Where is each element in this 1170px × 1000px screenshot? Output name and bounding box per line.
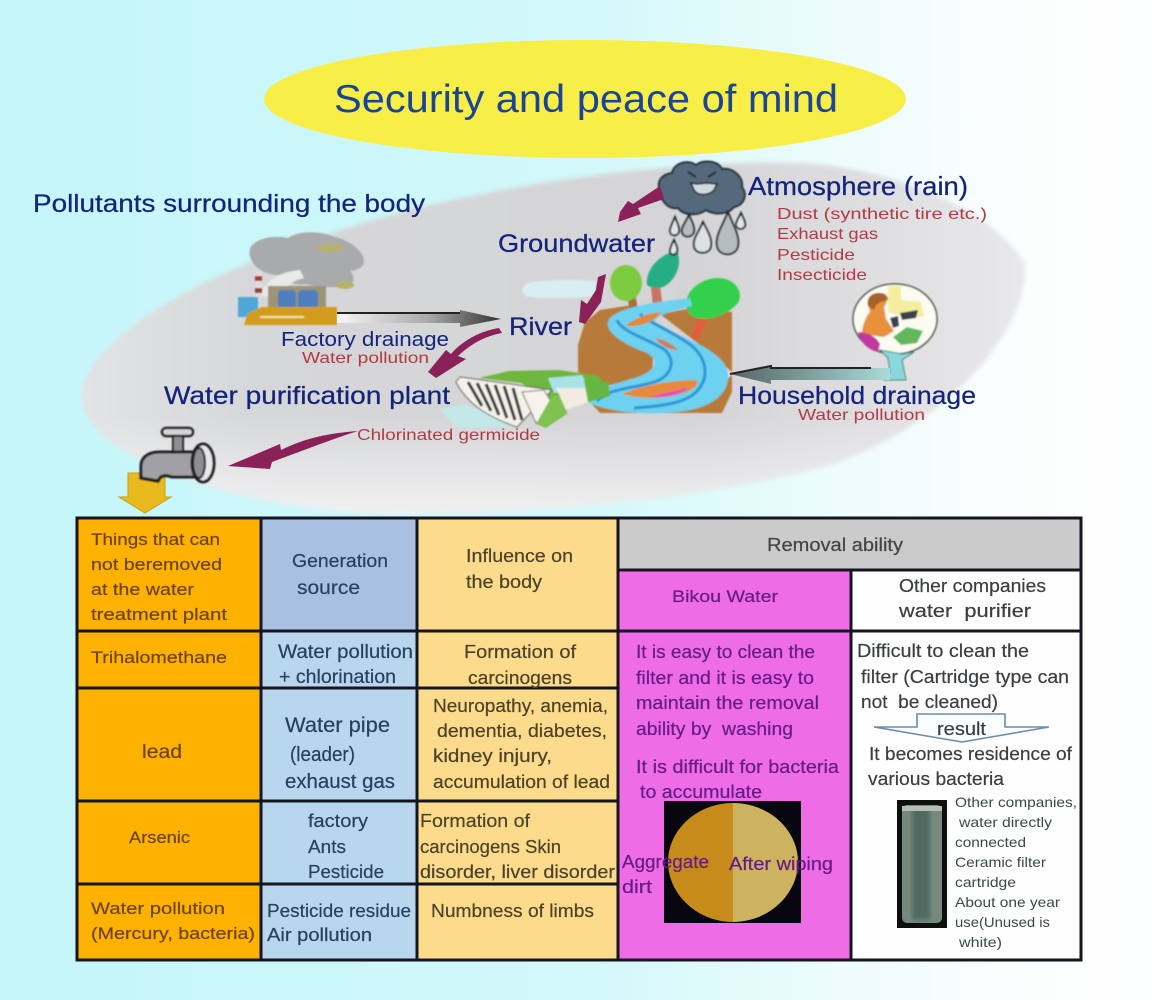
header: things that cannot be removed: treatment plant: [91, 605, 227, 624]
row: arsenic: factory: [308, 811, 368, 831]
panel: other companies removal: [857, 641, 1077, 950]
photo: filter disc: [664, 801, 801, 923]
icon: cloud with rain drops: [659, 162, 745, 255]
row: arsenic: disorder, liver disorder: [420, 862, 615, 882]
panel: other companies removal: various bacteria: [868, 769, 1005, 789]
label: atmosphere and pollutants: Atmosphere (rain): [748, 171, 968, 201]
icon: mist cloud: [523, 280, 596, 298]
gray backdrop oval: [82, 163, 1025, 514]
label: atmosphere and pollutants: Insecticide: [777, 267, 867, 284]
panel: bikou water removal: ability by washing: [636, 719, 793, 739]
arrow: factory to river: [337, 310, 501, 327]
icon: river landscape: [578, 251, 740, 413]
cartridge caption: use(Unused is: [955, 914, 1050, 930]
row: lead: exhaust gas: [285, 771, 395, 793]
arrow: result: [874, 714, 1049, 742]
panel: other companies removal: not be cleaned): [861, 692, 998, 712]
cartridge caption: [955, 794, 1077, 950]
header: generation source: [292, 551, 388, 599]
panel: other companies removal: result: [937, 719, 986, 739]
panel: bikou water removal: Aggregate: [622, 852, 709, 872]
label: chlorinated germicide: Chlorinated germicide: [357, 427, 540, 444]
label: atmosphere and pollutants: [748, 171, 987, 284]
cartridge caption: water directly: [958, 814, 1052, 830]
cartridge caption: Other companies,: [955, 794, 1077, 810]
panel: bikou water removal: After wiping: [729, 854, 833, 874]
arrow: cloud to groundwater: [618, 186, 664, 222]
row: lead: kidney injury,: [433, 746, 552, 766]
icon: household sink circle: [853, 284, 937, 380]
row: trihalomethane: Water pollution: [278, 642, 413, 663]
row: water pollution: Pesticide residue: [267, 901, 411, 921]
cartridge caption: cartridge: [955, 874, 1016, 890]
header: things that cannot be removed: not beremoved: [91, 555, 222, 574]
row: arsenic: Pesticide: [308, 862, 384, 882]
row: arsenic: Formation of: [420, 811, 531, 831]
row: lead: dementia, diabetes,: [437, 721, 607, 741]
panel: bikou water removal: filter and it is easy to: [636, 668, 814, 688]
label: household drainage: [738, 382, 976, 424]
panel: bikou water removal: maintain the removal: [636, 693, 819, 713]
row: trihalomethane: Formation of: [464, 642, 577, 662]
row: lead: lead: [142, 742, 182, 763]
row: water pollution: [91, 899, 594, 945]
title: [264, 40, 906, 158]
row: trihalomethane: Trihalomethane: [91, 648, 227, 667]
arrow: river to purification plant: [428, 328, 502, 378]
label: household drainage: Water pollution: [798, 407, 925, 424]
icon: faucet: [141, 428, 214, 482]
row: trihalomethane: + chlorination: [279, 667, 396, 688]
label: household drainage: Household drainage: [738, 382, 976, 410]
label: atmosphere and pollutants: Dust (synthetic tire etc.): [777, 206, 987, 223]
row: arsenic: Ants: [308, 837, 346, 857]
photo: used ceramic cartridge: [897, 800, 947, 928]
row: water pollution: Air pollution: [267, 925, 372, 945]
table: [77, 518, 1081, 960]
panel: other companies removal: Difficult to clean the: [857, 641, 1029, 661]
icon: yellow down arrow: [119, 473, 171, 513]
row: lead: [142, 696, 610, 793]
header: generation source: Generation: [292, 551, 388, 571]
panel: other companies removal: filter (Cartridge type can: [861, 667, 1069, 687]
row: arsenic: Arsenic: [129, 828, 191, 847]
row: water pollution: Numbness of limbs: [431, 901, 594, 921]
header: removal ability: Removal ability: [767, 535, 903, 555]
row: lead: Neuropathy, anemia,: [433, 696, 608, 716]
cartridge caption: About one year: [955, 894, 1060, 910]
label: factory drainage: Water pollution: [302, 350, 429, 367]
panel: bikou water removal: It is difficult for bacteria: [636, 757, 840, 777]
row: lead: (leader): [290, 744, 355, 766]
header: things that cannot be removed: Things that can: [91, 530, 220, 549]
cartridge caption: connected: [955, 834, 1026, 850]
header: influence on the body: Influence on: [466, 546, 573, 566]
label: water purification plant: Water purification plant: [164, 382, 450, 410]
header: other companies water purifier: water purifier: [898, 601, 1031, 621]
row: arsenic: carcinogens Skin: [420, 837, 561, 857]
panel: other companies removal: It becomes residence of: [869, 744, 1073, 764]
header: bikou water: Bikou Water: [672, 587, 778, 606]
title: Security and peace of mind: [334, 78, 838, 121]
arrow: household to river: [730, 366, 890, 384]
header: influence on the body: the body: [466, 572, 542, 592]
row: lead: Water pipe: [285, 714, 390, 737]
label: atmosphere and pollutants: Exhaust gas: [777, 226, 878, 243]
panel: bikou water removal: to accumulate: [640, 782, 762, 802]
row: water pollution: Water pollution: [91, 899, 225, 918]
icon: factory: [238, 232, 364, 325]
panel: bikou water removal: [622, 642, 840, 923]
header: other companies water purifier: [898, 576, 1046, 621]
row: trihalomethane: [91, 642, 577, 688]
row: trihalomethane: carcinogens: [468, 668, 572, 688]
icon: dam: [440, 370, 610, 428]
label: groundwater: Groundwater: [498, 230, 655, 258]
header: things that cannot be removed: at the water: [91, 580, 194, 599]
row: lead: accumulation of lead: [433, 772, 610, 792]
header: things that cannot be removed: [91, 530, 227, 624]
label: factory drainage: Factory drainage: [281, 329, 449, 351]
arrow: plant to faucet: [228, 431, 358, 469]
header: other companies water purifier: Other companies: [899, 576, 1046, 596]
label: factory drainage: [281, 329, 449, 367]
row: arsenic: [129, 811, 615, 882]
cartridge caption: Ceramic filter: [955, 854, 1046, 870]
label: river: River: [509, 313, 572, 341]
header: generation source: source: [297, 578, 360, 599]
table cell fills: [77, 518, 1081, 960]
panel: bikou water removal: dirt: [622, 877, 652, 897]
header: influence on the body: [466, 546, 573, 592]
arrow: groundwater to river: [579, 274, 606, 324]
heading: pollutants: Pollutants surrounding the body: [33, 190, 426, 218]
row: water pollution: (Mercury, bacteria): [91, 924, 255, 943]
table grid lines: [77, 518, 1081, 960]
cartridge caption: white): [958, 934, 1002, 950]
panel: bikou water removal: It is easy to clean the: [636, 642, 815, 662]
label: atmosphere and pollutants: Pesticide: [777, 247, 855, 264]
